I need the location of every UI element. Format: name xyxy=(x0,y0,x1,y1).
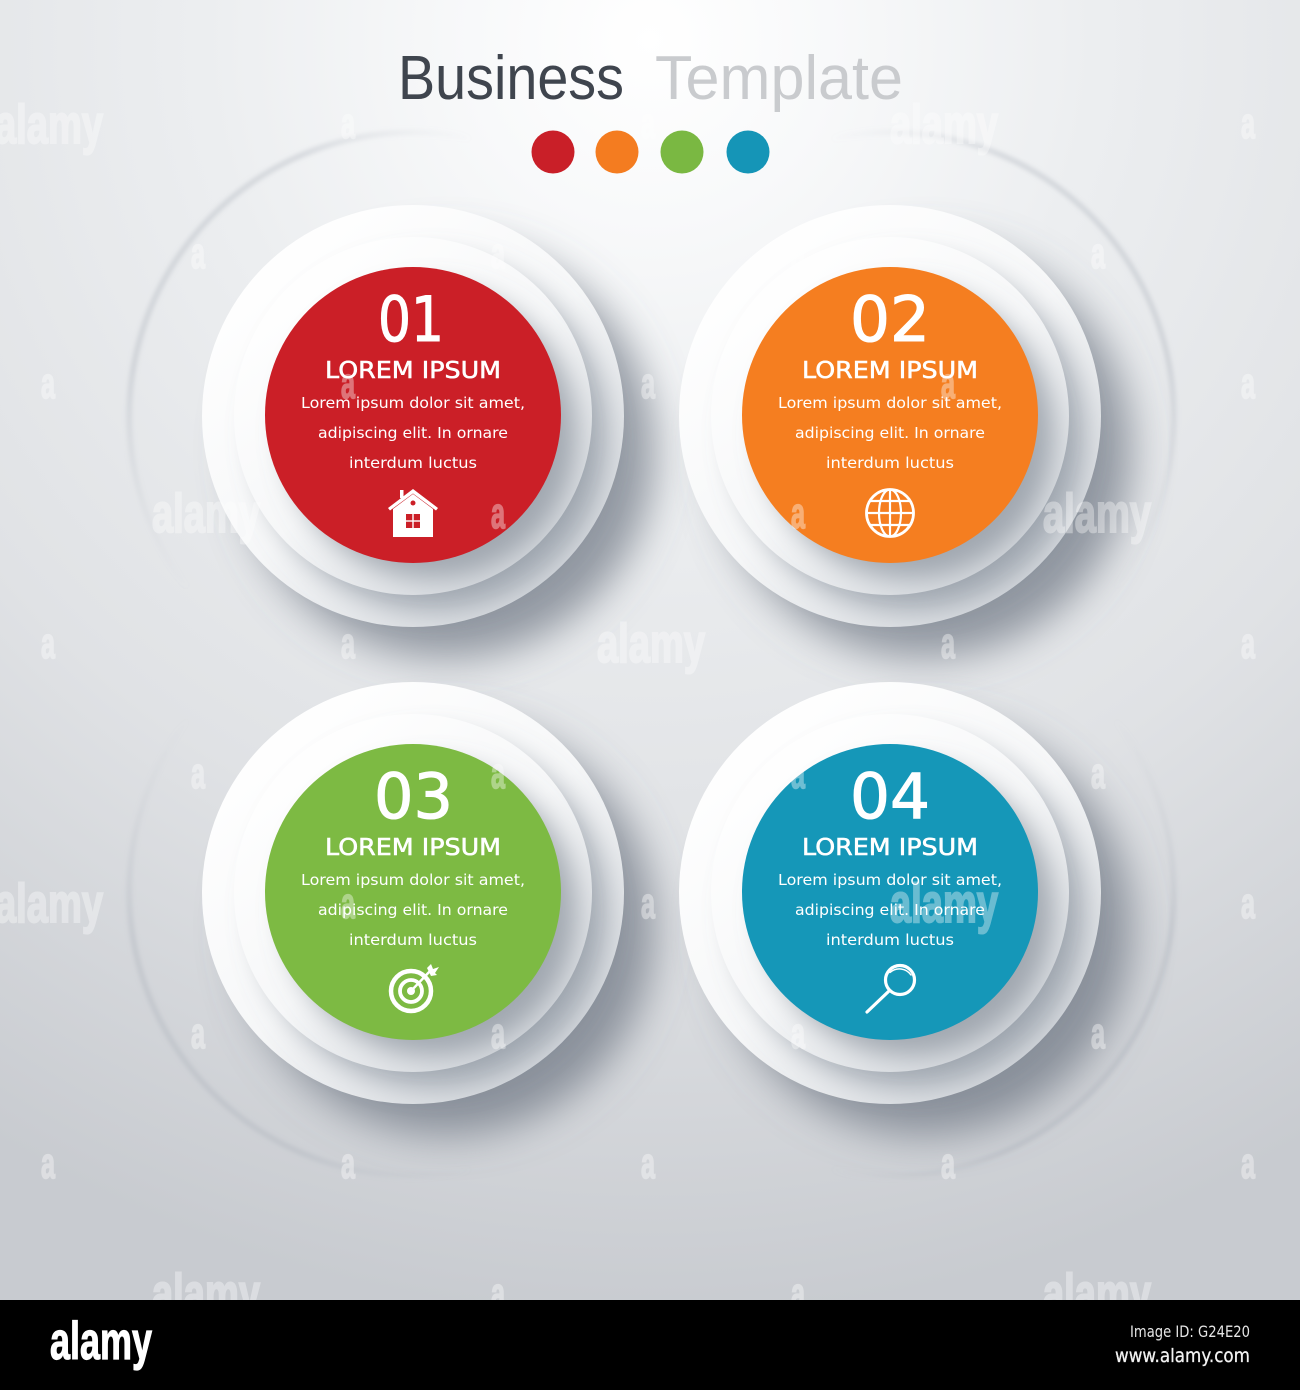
body text: adipiscing elit. In ornare xyxy=(318,424,508,442)
watermarks: a xyxy=(191,229,205,278)
body text: interdum luctus xyxy=(826,454,954,472)
body text: Lorem ipsum dolor sit amet, xyxy=(301,871,525,889)
number 01: 01 xyxy=(378,283,444,356)
watermarks: a xyxy=(1241,619,1255,668)
body text: adipiscing elit. In ornare xyxy=(795,424,985,442)
watermarks: a xyxy=(41,1139,55,1188)
panel: card 04 xyxy=(679,682,1132,1135)
watermarks: a xyxy=(491,1269,505,1318)
watermarks: alamy xyxy=(1043,1262,1151,1324)
watermarks: a xyxy=(491,1009,505,1058)
watermarks: a xyxy=(41,619,55,668)
watermarks: a xyxy=(491,229,505,278)
icon: house xyxy=(388,489,438,537)
colour dots legend xyxy=(532,130,770,174)
heading: LOREM IPSUM xyxy=(802,358,978,384)
panel: card 01 xyxy=(202,205,655,658)
body text: interdum luctus xyxy=(826,931,954,949)
watermarks: a xyxy=(941,1139,955,1188)
watermarks: a xyxy=(341,1139,355,1188)
image id: Image ID: G24E20 xyxy=(1130,1322,1250,1341)
watermarks: a xyxy=(641,359,655,408)
watermarks: a xyxy=(641,99,655,148)
panel: card 02 xyxy=(679,205,1132,658)
watermarks: a xyxy=(491,489,505,538)
watermarks: a xyxy=(341,99,355,148)
body text: interdum luctus xyxy=(349,931,477,949)
body text: interdum luctus xyxy=(349,454,477,472)
watermarks: a xyxy=(341,879,355,928)
watermarks: a xyxy=(791,489,805,538)
watermarks: a xyxy=(1241,99,1255,148)
panel: card 03 xyxy=(202,682,655,1135)
icon: target xyxy=(391,964,439,1011)
watermarks: a xyxy=(641,1139,655,1188)
watermarks: alamy xyxy=(152,1262,260,1324)
red disc xyxy=(265,267,561,563)
title: Business xyxy=(398,44,624,113)
watermarks: a xyxy=(191,749,205,798)
heading: LOREM IPSUM xyxy=(325,358,501,384)
orange disc xyxy=(742,267,1038,563)
watermarks: a xyxy=(341,619,355,668)
footer logo: alamy xyxy=(50,1312,152,1371)
number 02: 02 xyxy=(850,283,930,356)
icon: globe xyxy=(866,490,914,536)
body text: Lorem ipsum dolor sit amet, xyxy=(778,871,1002,889)
watermarks: a xyxy=(791,749,805,798)
large background ring arcs xyxy=(129,132,1174,1176)
body text xyxy=(778,871,1002,949)
watermarks: alamy xyxy=(152,482,260,544)
green disc xyxy=(265,744,561,1040)
watermarks: a xyxy=(941,359,955,408)
watermarks: a xyxy=(1091,1009,1105,1058)
watermarks: a xyxy=(791,1269,805,1318)
watermarks: a xyxy=(791,229,805,278)
watermarks: alamy xyxy=(597,612,705,674)
watermarks: alamy xyxy=(890,93,998,155)
watermarks: alamy xyxy=(1043,482,1151,544)
footer bar xyxy=(0,1300,1300,1390)
body text: Lorem ipsum dolor sit amet, xyxy=(301,394,525,412)
body text xyxy=(778,394,1002,472)
number 04: 04 xyxy=(850,760,930,833)
watermarks: a xyxy=(791,1009,805,1058)
blue disc xyxy=(742,744,1038,1040)
watermarks: a xyxy=(191,1009,205,1058)
watermarks: a xyxy=(1091,229,1105,278)
watermarks: a xyxy=(941,619,955,668)
watermarks: a xyxy=(491,749,505,798)
body text: adipiscing elit. In ornare xyxy=(795,901,985,919)
body text xyxy=(301,871,525,949)
website: www.alamy.com xyxy=(1115,1345,1250,1367)
watermarks: a xyxy=(641,879,655,928)
heading: LOREM IPSUM xyxy=(325,835,501,861)
body text: adipiscing elit. In ornare xyxy=(318,901,508,919)
icon: magnifier xyxy=(867,966,914,1012)
title: Template xyxy=(655,44,903,113)
watermarks: alamy xyxy=(890,872,998,934)
watermarks: a xyxy=(1241,1139,1255,1188)
watermarks: a xyxy=(1241,359,1255,408)
body text: Lorem ipsum dolor sit amet, xyxy=(778,394,1002,412)
heading: LOREM IPSUM xyxy=(802,835,978,861)
watermarks: a xyxy=(41,359,55,408)
title xyxy=(398,44,903,113)
watermarks: a xyxy=(341,359,355,408)
watermarks: a xyxy=(1241,879,1255,928)
watermarks: a xyxy=(1091,749,1105,798)
body text xyxy=(301,394,525,472)
number 03: 03 xyxy=(374,760,453,833)
